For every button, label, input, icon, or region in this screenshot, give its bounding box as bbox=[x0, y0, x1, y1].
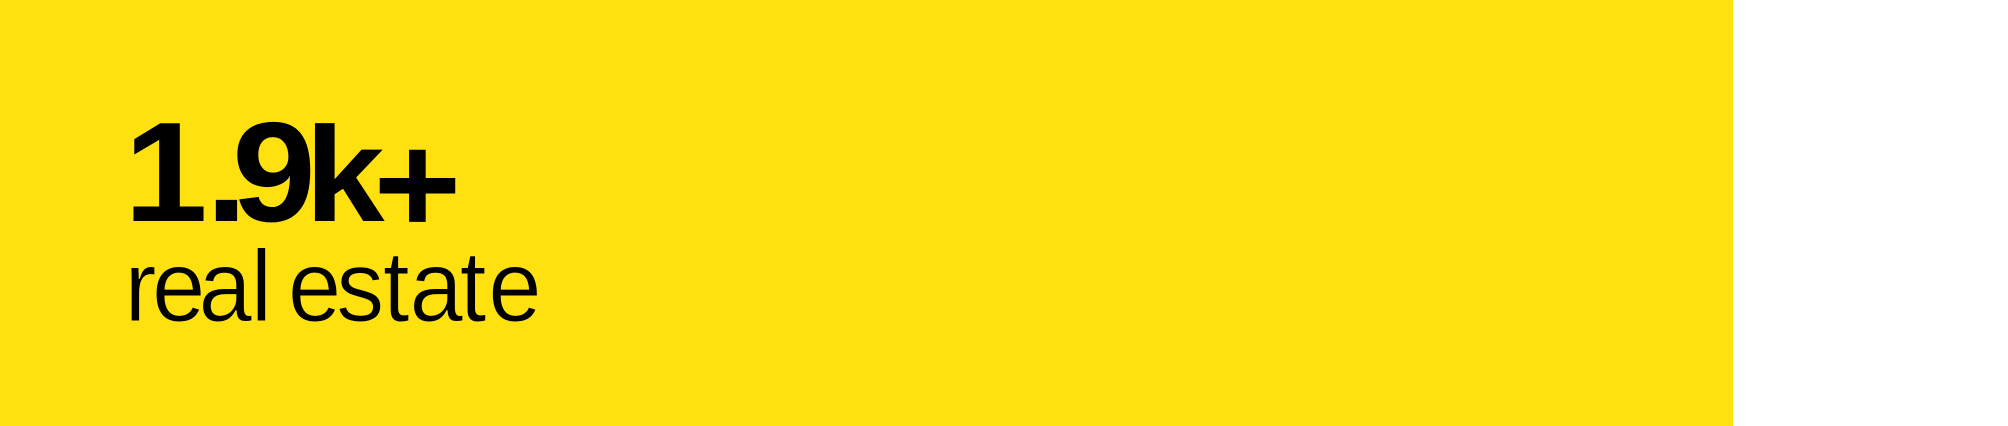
stat label: real estate bbox=[124, 230, 542, 343]
stat value: k bbox=[305, 100, 385, 250]
stat value: 9 bbox=[232, 94, 316, 252]
stat value: . bbox=[206, 94, 247, 252]
stat value: + bbox=[373, 106, 461, 264]
stat value: 1 bbox=[124, 94, 208, 252]
